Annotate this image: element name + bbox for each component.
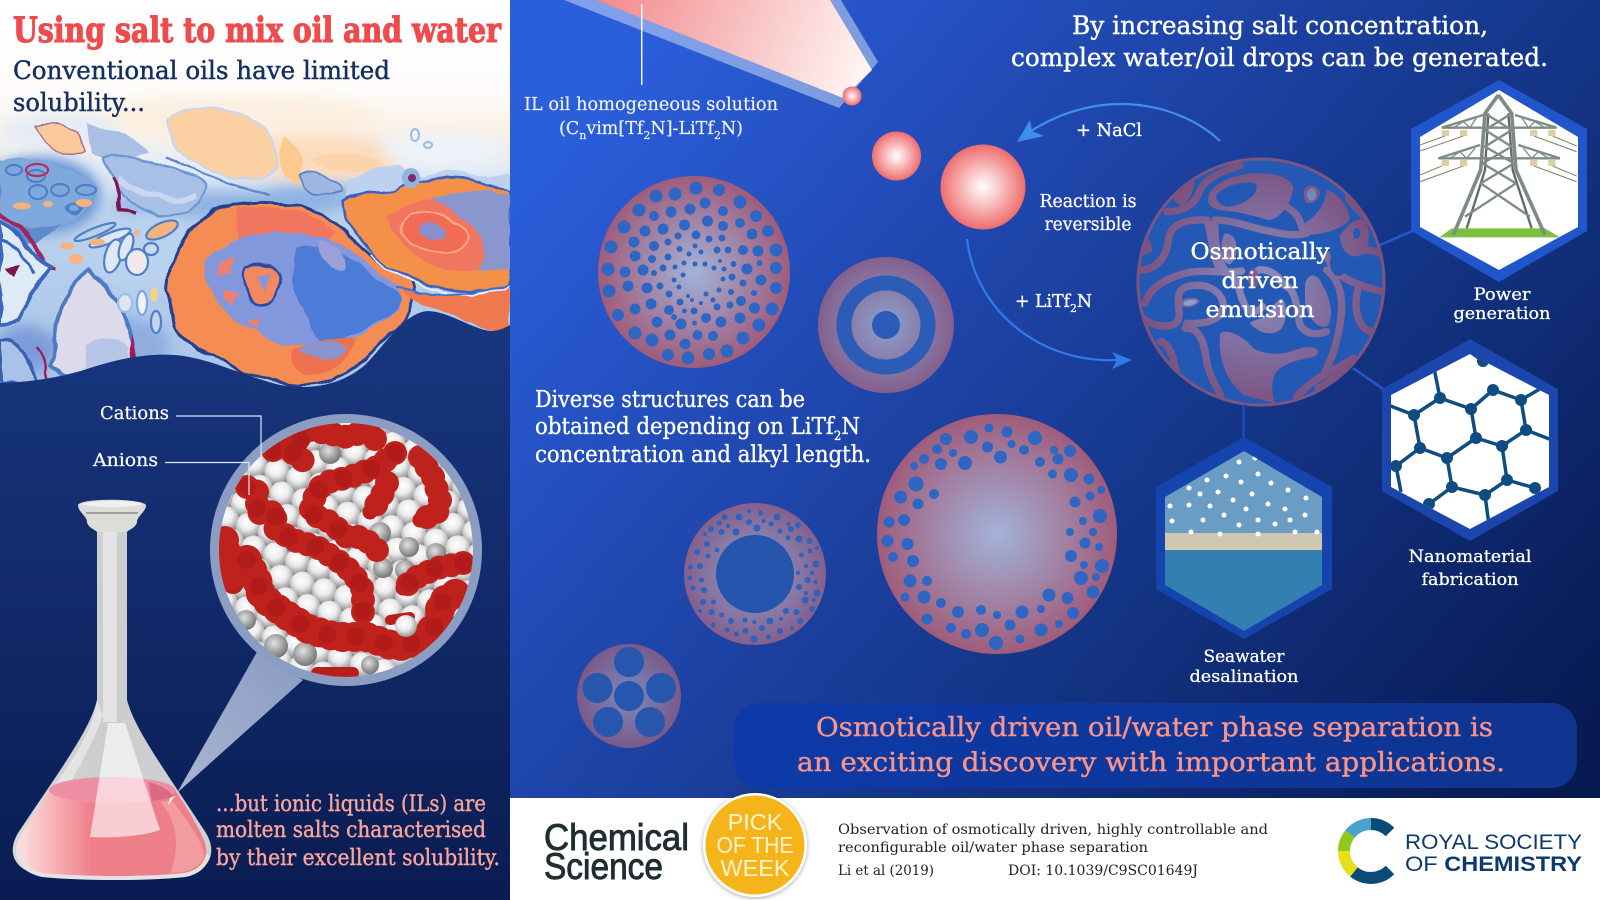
intro text: Conventional oils have limited (13, 56, 390, 85)
citation text: reconfigurable oil/water phase separation (838, 840, 1148, 856)
title: Using salt to mix oil and water (13, 10, 501, 51)
icon: pylon (1420, 95, 1577, 237)
red cation chains (225, 430, 463, 673)
logo: Chemical Science: Science (544, 846, 663, 887)
intro text: solubility... (13, 88, 145, 117)
heading: salt concentration: By increasing salt concentration, (1072, 11, 1488, 40)
ionic liquids text (216, 791, 500, 871)
labels: applications: fabrication (1422, 570, 1519, 590)
labels: applications: Power (1474, 285, 1531, 305)
flask highlight (90, 723, 160, 837)
arrow: NaCl (1017, 104, 1220, 142)
structure: large droplet with edge dots (877, 414, 1117, 654)
grey spheres (219, 423, 473, 677)
citation text (838, 822, 1268, 879)
salt dots (1168, 456, 1320, 536)
icon: conical flask (13, 500, 211, 879)
text: diverse structures: Diverse structures can be (535, 385, 805, 413)
emulsion label: Osmotically (1190, 239, 1330, 265)
icon: pipette tip (564, 0, 878, 108)
heading: salt concentration (1011, 11, 1548, 72)
label lines to molecules (165, 416, 261, 495)
structure: droplet with six inner cores (577, 644, 681, 748)
marble oil image (0, 88, 510, 387)
text: diverse structures: concentration and alkyl length. (535, 440, 871, 468)
logo: Royal Society of Chemistry: OF CHEMISTRY (1405, 853, 1582, 876)
arrow: LiTf2N (967, 239, 1132, 369)
structure: concentric onion droplet (818, 257, 954, 393)
citation text: DOI: 10.1039/C9SC01649J (1008, 863, 1198, 879)
orange oil blobs (168, 178, 510, 385)
logo: Chemical Science (544, 817, 689, 887)
badge: pick of the week (703, 793, 807, 897)
label: reaction reversible (1040, 192, 1137, 235)
text: IL oil solution label (524, 95, 778, 142)
labels: applications: desalination (1190, 667, 1299, 687)
structure: osmotically driven emulsion (1138, 159, 1384, 405)
panel: footer (510, 793, 1600, 900)
small oil drop (872, 132, 921, 180)
text: IL oil solution label: IL oil homogeneous solution (524, 95, 778, 115)
text: diverse structures (535, 385, 871, 468)
emulsion label: emulsion (1206, 297, 1314, 323)
label: plus LiTf2N: + LiTf (1015, 291, 1072, 312)
callout: key message: an exciting discovery with important applications. (797, 747, 1505, 778)
text: IL oil solution label: n (579, 129, 586, 142)
text: diverse structures: 2 (834, 429, 841, 444)
pink liquid (16, 782, 206, 876)
ionic liquids text: molten salts characterised (216, 817, 486, 843)
hexagon: power generation (1411, 80, 1587, 282)
large oil drop (940, 144, 1026, 230)
logo: Chemical Science: Chemical (544, 817, 689, 858)
labels: applications: generation (1454, 304, 1551, 324)
text: IL oil solution label: 2 (643, 129, 650, 142)
mauve filled blobs (1140, 165, 1369, 403)
badge: pick of the week: PICK (728, 809, 783, 835)
label: plus NaCl: + NaCl (1076, 120, 1142, 141)
text: diverse structures: obtained depending on LiTf (535, 412, 864, 440)
structure: multi-droplet sphere (598, 176, 790, 368)
label: reaction reversible: reversible (1044, 215, 1132, 235)
emulsion label: driven (1222, 268, 1298, 294)
labels: applications: Nanomaterial (1408, 547, 1532, 567)
callout: key message (734, 703, 1577, 788)
text: diverse structures: N (841, 412, 860, 440)
text: IL oil solution label: N]-LiTf (650, 119, 715, 139)
badge: pick of the week: WEEK (720, 855, 790, 881)
ionic liquids text: ...but ionic liquids (ILs) are (216, 791, 486, 817)
citation text: Li et al (2019) (838, 863, 934, 879)
navy wave panel (0, 311, 510, 900)
text: IL oil solution label: N) (721, 119, 743, 139)
panel: right blue background (510, 0, 1600, 798)
callout: key message: Osmotically driven oil/water phase separation is (816, 712, 1493, 743)
label: plus LiTf2N: 2 (1070, 302, 1077, 315)
mauve contour bands (1140, 166, 1382, 397)
citation text: Observation of osmotically driven, highly controllable and (838, 822, 1268, 838)
structure: droplet with central core (684, 503, 826, 645)
hexagon: nanomaterial fabrication (1382, 339, 1558, 541)
panel: left column (0, 0, 510, 900)
text: IL oil solution label: vim[Tf (585, 119, 645, 139)
logo: Royal Society of Chemistry (1344, 824, 1582, 878)
text: IL oil solution label: (C (559, 119, 579, 139)
logo: Royal Society of Chemistry: ROYAL SOCIETY (1405, 831, 1582, 854)
left marble veins and bubbles (0, 108, 510, 385)
ionic liquids text: by their excellent solubility. (216, 845, 500, 871)
intro text (13, 56, 390, 117)
label: cations: Cations (100, 404, 169, 424)
blue holes (1216, 182, 1360, 288)
text: IL oil solution label: 2 (714, 129, 721, 142)
icon: graphene lattice (1388, 352, 1552, 525)
hexagon: seawater desalination (1156, 437, 1332, 640)
label: anions: Anions (92, 451, 158, 471)
label: reaction reversible: Reaction is (1040, 192, 1137, 212)
emulsion label (1190, 239, 1330, 323)
labels: applications: Seawater (1204, 647, 1285, 667)
labels: applications (1190, 285, 1551, 687)
badge: pick of the week: OF THE (716, 832, 794, 858)
heading: salt concentration: complex water/oil drops can be generated. (1011, 43, 1548, 72)
magnified ionic liquid circle (210, 414, 482, 686)
connectors to application hexagons (1244, 231, 1412, 440)
callout cone (177, 652, 303, 793)
label: plus LiTf2N: N (1077, 291, 1092, 312)
